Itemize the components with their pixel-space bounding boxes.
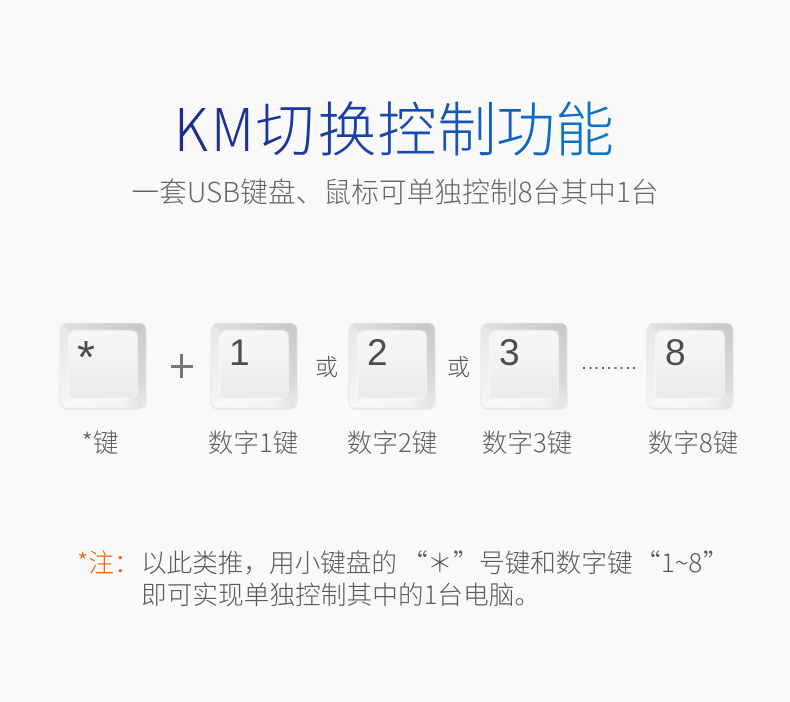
subtitle: 一套USB键盘、鼠标可单独控制8台其中1台 [131,170,659,210]
label: number 3 key: 数字3键 [482,423,572,460]
note line 1: 以此类推，用小键盘的 [141,543,397,580]
label: number 2 key: 数字2键 [347,423,437,460]
label: number 8 key: 数字8键 [648,423,738,460]
note line 1 [141,543,729,580]
key: 8: 8 [665,332,686,373]
label: number 1 key: 数字1键 [208,423,298,460]
key: 3 [481,323,567,408]
key: 2: 2 [367,332,388,373]
key: asterisk [60,323,146,408]
title [174,91,614,168]
ellipsis dots [583,367,636,369]
note marker: *注： [77,543,140,580]
note line 1: ” [453,543,479,580]
key: asterisk: * [77,331,95,383]
key: 8 [647,323,733,408]
note line 1: 号键和数字键 [479,543,633,580]
note line 2: 即可实现单独控制其中的1台电脑。 [141,575,540,612]
note line 1: “ [402,543,428,580]
note line 1: “ [635,543,661,580]
key: 1: 1 [229,332,250,373]
note line 1: ” [703,543,729,580]
label: asterisk key: *键 [82,423,118,460]
or label 1: 或 [315,348,338,382]
key: 2 [349,323,435,408]
note line 1: ＊ [427,543,453,580]
key: 3: 3 [499,332,520,373]
note line 1: 1~8 [661,543,702,580]
key: 1 [211,323,297,408]
plus sign [171,354,193,378]
or label 2: 或 [447,348,470,382]
